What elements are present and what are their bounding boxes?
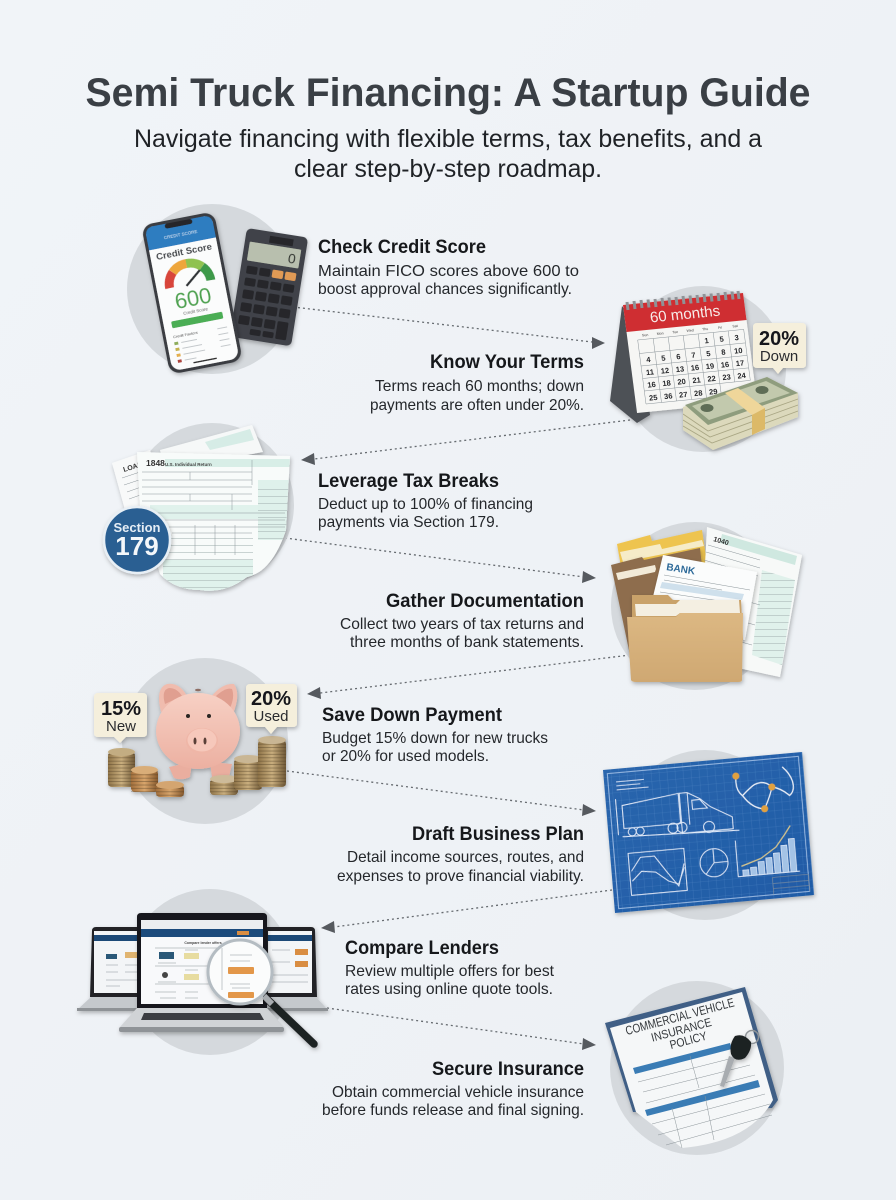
icon: phone: 600	[173, 283, 213, 314]
heading: Know Your Terms	[430, 352, 584, 373]
callout: 15% new: 15%	[101, 698, 141, 720]
icon: laptops and magnifying glass	[77, 889, 328, 1055]
icon: bank statement	[645, 555, 757, 640]
icon: calendar: 22	[707, 374, 716, 384]
text block	[318, 496, 533, 531]
step 4: gather documentation	[340, 522, 802, 690]
heading: Compare Lenders	[345, 938, 499, 959]
title: Semi Truck Financing: A Startup Guide	[86, 71, 810, 115]
icon: calendar: 5	[706, 349, 711, 358]
text block	[340, 616, 584, 651]
icon: center laptop	[119, 913, 284, 1032]
text block: Deduct up to 100% of financing	[318, 496, 533, 513]
icon: stack of cash	[683, 377, 798, 450]
icon: phone: Credit Score	[155, 241, 213, 263]
subtitle: Navigate financing with flexible terms, tax benefits, and a	[134, 125, 762, 153]
icon: back forms: LOAN	[123, 461, 144, 474]
icon: phone: Credit Factors	[173, 330, 198, 339]
icon: calendar: 6	[676, 352, 681, 361]
icon: calendar: 36	[664, 391, 673, 401]
icon: calculator: 0	[287, 250, 297, 267]
icon: calendar: Sun	[642, 333, 649, 338]
step 7: compare lenders	[77, 889, 555, 1055]
icon: calendar: 5	[719, 335, 724, 344]
icon: section 179 badge: 179	[115, 531, 159, 561]
icon: truck drawing	[615, 788, 739, 841]
icon: policy document	[605, 987, 778, 1148]
icon: calendar: 5	[661, 354, 666, 363]
arrow: documentation to down payment	[307, 655, 630, 699]
text block: Terms reach 60 months; down	[375, 378, 584, 395]
icon: calendar: 21	[692, 375, 701, 385]
icon: calendar: 1	[704, 336, 709, 345]
callout: 20% down	[753, 323, 806, 374]
text block: rates using online quote tools.	[345, 981, 553, 998]
icon: calendar: Thu	[702, 327, 708, 331]
icon: section 179 badge	[104, 507, 170, 573]
callout: 20% down: 20%	[759, 328, 799, 350]
arrow: down payment to business plan	[287, 771, 596, 816]
icon: phone	[141, 211, 243, 375]
pie chart	[699, 847, 729, 878]
icon: bank statement: BANK	[666, 562, 697, 578]
icon: phone: Credit Score	[183, 306, 209, 316]
icon: policy document: POLICY	[668, 1029, 708, 1052]
icon: calendar: 16	[690, 363, 700, 373]
icon: calendar: Mon	[657, 331, 664, 336]
heading: Check Credit Score	[318, 237, 486, 258]
icon: car key	[720, 1030, 758, 1087]
arrow: tax breaks to documentation	[285, 538, 596, 583]
icon: main tax form	[130, 450, 295, 595]
icon: calendar	[610, 291, 757, 423]
heading: Save Down Payment	[322, 705, 503, 726]
icon: tax forms with section 179 badge	[104, 423, 295, 595]
icon: route map	[732, 766, 795, 815]
icon: main tax form: U.S. Individual Return	[165, 462, 212, 467]
arrow: lenders to insurance	[327, 1008, 596, 1050]
arrow: terms to tax breaks	[301, 420, 630, 465]
icon: calendar: Fri	[718, 325, 723, 330]
text block: expenses to prove financial viability.	[337, 868, 584, 885]
icon: main tax form: 1848	[146, 458, 165, 468]
icon: calendar: 8	[721, 348, 726, 357]
callout: 20% used: 20%	[251, 688, 291, 710]
arrow: business plan to lenders	[321, 890, 612, 933]
text block	[370, 378, 584, 414]
icon: calendar: 7	[691, 351, 696, 360]
icon: calendar: 27	[679, 390, 688, 400]
text block: before funds release and final signing.	[322, 1102, 584, 1119]
icon: calendar: 12	[660, 366, 670, 376]
icon: phone and calculator	[127, 204, 308, 375]
icon: calendar: 25	[649, 393, 658, 403]
icon: right laptop	[264, 927, 328, 1011]
icon: calendar: Wed	[686, 328, 694, 333]
icon: calendar: 10	[734, 346, 743, 356]
icon: piggy bank and coins	[94, 658, 297, 824]
icon: front kraft folder	[627, 595, 743, 682]
step 6: draft business plan	[337, 750, 814, 920]
icon: calendar: 23	[722, 372, 731, 382]
icon: phone: CREDIT SCORE	[164, 229, 198, 240]
icon: calendar: 13	[675, 364, 685, 374]
callout: 15% new	[94, 693, 147, 743]
callout: 20% used	[246, 684, 297, 734]
icon: calendar: 11	[645, 367, 655, 377]
icon: calendar: 28	[694, 388, 703, 398]
icon: calendar: 18	[662, 378, 671, 388]
text block: or 20% for used models.	[322, 748, 489, 765]
text block: Review multiple offers for best	[345, 963, 555, 980]
icon: policy document: COMMERCIAL VEHICLE	[624, 995, 736, 1038]
arrow: credit score to terms	[293, 307, 605, 349]
text block: payments are often under 20%.	[370, 397, 584, 414]
text block	[345, 963, 555, 998]
icon: calendar: 3	[734, 333, 739, 342]
step 5: save down payment	[94, 658, 548, 824]
icon: calendar: 4	[646, 355, 652, 364]
step 1: check credit score	[127, 204, 579, 375]
icon: tax form	[700, 527, 802, 677]
icon: coin stacks	[108, 736, 286, 797]
text block: Maintain FICO scores above 600 to	[318, 263, 579, 280]
text block: Collect two years of tax returns and	[340, 616, 584, 633]
bar chart	[734, 825, 800, 877]
subtitle: clear step-by-step roadmap.	[294, 155, 602, 183]
text block: payments via Section 179.	[318, 514, 499, 531]
icon: calendar: 24	[737, 371, 747, 381]
icon: tax form: 1040	[712, 536, 729, 547]
text block	[322, 1084, 584, 1119]
heading: Draft Business Plan	[412, 824, 584, 845]
step 8: secure insurance	[322, 981, 784, 1155]
icon: brown folder	[611, 548, 710, 655]
text block	[318, 263, 579, 298]
icon: calendar: Sat	[732, 324, 738, 328]
icon: section 179 badge: Section	[114, 520, 161, 535]
icon: magnifying glass	[208, 940, 314, 1044]
icon: piggy bank	[156, 684, 240, 779]
icon: calendar: 60 months	[649, 303, 721, 326]
icon: calendar: 20	[677, 377, 686, 387]
icon: calendar: 17	[735, 358, 745, 368]
line chart	[628, 848, 687, 895]
step 3: leverage tax breaks	[104, 423, 533, 595]
icon: calculator	[230, 228, 308, 346]
callout: 20% down: Down	[760, 348, 798, 365]
icon: back forms	[112, 425, 263, 510]
icon: calendar: Tue	[672, 330, 678, 334]
icon: insurance policy and key	[605, 981, 784, 1155]
heading: Gather Documentation	[386, 591, 584, 612]
icon: calendar: 29	[709, 387, 718, 397]
icon: calendar: 16	[720, 360, 730, 370]
icon: yellow folder	[617, 530, 708, 590]
step 2: know your terms	[370, 286, 806, 452]
icon: calendar: 16	[647, 380, 656, 390]
subtitle	[134, 125, 762, 183]
icon: left laptop	[77, 927, 142, 1011]
icon: blueprint	[603, 750, 814, 920]
icon: center laptop: Compare lender offers	[184, 941, 222, 945]
text block: three months of bank statements.	[350, 634, 584, 651]
text block	[337, 849, 584, 885]
text block: boost approval chances significantly.	[318, 281, 572, 298]
callout: 20% used: Used	[253, 708, 289, 725]
icon: calendar: 19	[705, 361, 715, 371]
callout: 15% new: New	[106, 718, 136, 735]
icon: policy document: INSURANCE	[650, 1015, 713, 1045]
text block: Detail income sources, routes, and	[347, 849, 584, 866]
heading: Secure Insurance	[432, 1059, 584, 1080]
heading: Leverage Tax Breaks	[318, 471, 499, 492]
icon: folders and documents	[611, 522, 802, 690]
icon: calendar and cash	[610, 286, 806, 452]
text block: Budget 15% down for new trucks	[322, 730, 548, 747]
text block	[322, 730, 548, 765]
text block: Obtain commercial vehicle insurance	[332, 1084, 584, 1101]
